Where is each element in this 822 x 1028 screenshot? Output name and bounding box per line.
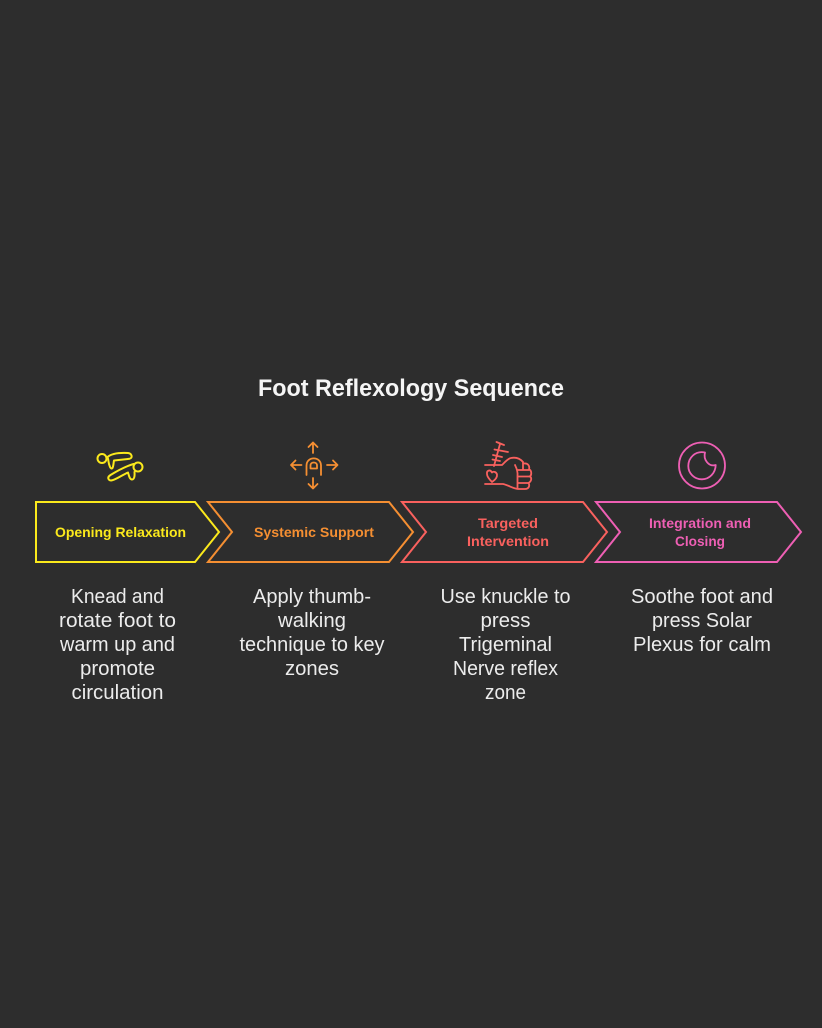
description: step 1: warm up and [59,634,175,656]
arrow: Systemic Support [208,502,413,562]
description: step 1: promote [80,658,155,680]
description: step 3: Trigeminal [459,634,552,656]
description: step 2: zones [285,658,339,680]
step 4: Integration and Closing [596,442,801,656]
label: Systemic Support: Systemic Support [254,524,374,540]
description: step 1: circulation [72,682,164,704]
description: step 3 [440,586,570,704]
description: step 1: Knead and [71,586,164,608]
icon: fist pressing reflex point [485,442,531,489]
description: step 2: walking [277,610,346,632]
icon: moon in circle [679,442,725,488]
description: step 2 [240,586,384,680]
icon: finger with four arrows [291,442,338,488]
description: step 3: Nerve reflex [453,658,558,680]
description: step 4: Soothe foot and [631,586,773,608]
description: step 4: Plexus for calm [633,634,771,656]
label: Opening Relaxation: Opening Relaxation [55,524,186,540]
arrow: Integration and Closing [596,502,801,562]
label: Targeted Intervention: Intervention [467,533,549,549]
step 1: Opening Relaxation [36,453,219,704]
label: Integration and Closing: Closing [675,533,725,549]
arrow: Opening Relaxation [36,502,219,562]
description: step 2: technique to key [240,634,384,656]
description: step 3: zone [485,682,526,704]
label: Targeted Intervention [467,515,549,549]
description: step 3: press [480,610,530,632]
label: Integration and Closing [649,515,751,549]
description: step 3: Use knuckle to [440,586,570,608]
label: Targeted Intervention: Targeted [478,515,538,531]
description: step 2: Apply thumb- [253,586,371,608]
description: step 1 [59,586,176,704]
step 2: Systemic Support [208,442,413,680]
title: Foot Reflexology Sequence [258,375,564,402]
description: step 1: rotate foot to [59,610,176,632]
description: step 4: press Solar [652,610,752,632]
icon: two reclining figures [98,453,142,480]
step 3: Targeted Intervention [402,442,607,704]
arrow: Targeted Intervention [402,502,607,562]
description: step 4 [631,586,773,656]
label: Integration and Closing: Integration and [649,515,751,531]
